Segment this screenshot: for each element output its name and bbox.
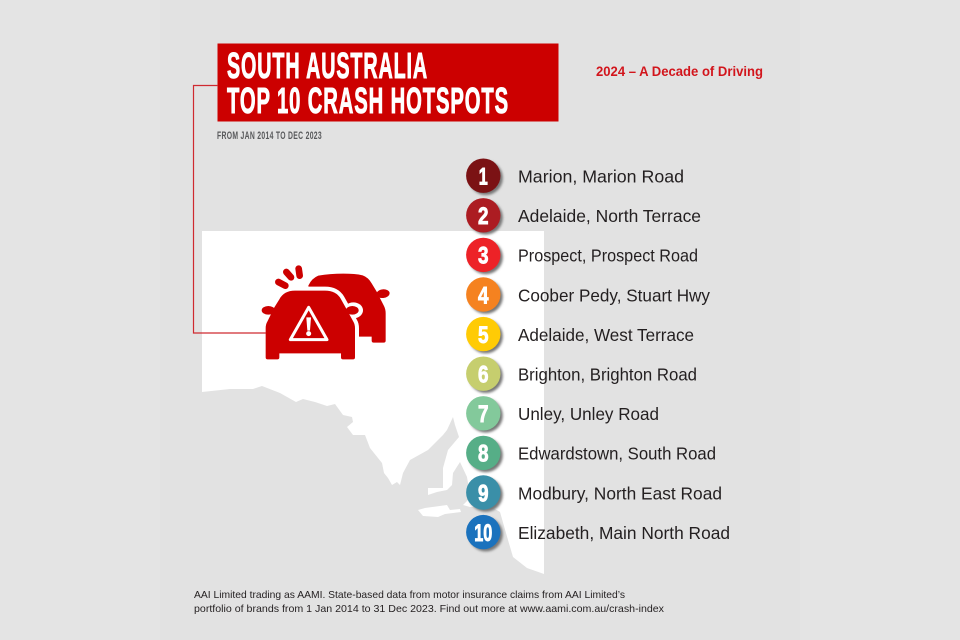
rank 8	[466, 436, 716, 472]
rank 7: 7	[478, 401, 489, 428]
front car	[262, 291, 363, 360]
rank 4: Coober Pedy, Stuart Hwy	[518, 285, 710, 305]
warning triangle	[290, 307, 327, 340]
rank 2: Adelaide, North Terrace	[518, 206, 701, 226]
tagline: 2024 – A Decade of Driving	[596, 64, 763, 79]
map: South Australia	[202, 231, 544, 574]
rank 5: 5	[478, 322, 489, 349]
rank 3: Prospect, Prospect Road	[518, 246, 698, 266]
rank 6: Brighton, Brighton Road	[518, 364, 697, 384]
rank 9	[466, 475, 722, 512]
rank 2	[466, 198, 701, 235]
rank 6	[466, 356, 697, 393]
footnote: AAI Limited trading as AAMI. State-based data from motor insurance claims from AAI Limited’s	[194, 589, 625, 601]
rank 4: 4	[478, 282, 489, 309]
title text line 2: TOP 10 CRASH HOTSPOTS	[227, 80, 509, 121]
rank 5	[466, 317, 694, 353]
Kangaroo Island	[418, 505, 461, 517]
rank 3	[466, 238, 698, 274]
back car	[308, 274, 390, 343]
rank 1	[466, 158, 684, 195]
rank 7	[466, 396, 659, 433]
rank 1: 1	[479, 164, 488, 190]
rank 8: Edwardstown, South Road	[518, 444, 716, 464]
rank 3: 3	[478, 243, 489, 270]
impact marks	[278, 269, 300, 286]
rank 2: 2	[478, 203, 489, 230]
rank 9: Modbury, North East Road	[518, 483, 722, 503]
rank 9: 9	[478, 480, 489, 507]
rank 6: 6	[478, 362, 489, 388]
icon: crashed cars with warning triangle	[262, 269, 390, 360]
rank 10	[466, 515, 730, 551]
footnote: portfolio of brands from 1 Jan 2014 to 31 Dec 2023. Find out more at www.aami.com.au/crash-index	[194, 603, 665, 615]
footnote	[194, 589, 665, 615]
rank 7: Unley, Unley Road	[518, 404, 659, 424]
rank 8: 8	[478, 441, 489, 468]
rank 10: Elizabeth, Main North Road	[518, 523, 730, 543]
rank 10: 10	[474, 520, 492, 547]
title text line 1: SOUTH AUSTRALIA	[227, 45, 428, 86]
rank 1: Marion, Marion Road	[518, 166, 684, 186]
rank 5: Adelaide, West Terrace	[518, 325, 694, 345]
ranked list of hotspots	[466, 158, 730, 551]
rank 4	[466, 277, 710, 314]
title banner	[218, 44, 558, 122]
subtitle: date range: FROM JAN 2014 TO DEC 2023	[217, 130, 322, 142]
connector line from title to icon	[194, 86, 266, 333]
